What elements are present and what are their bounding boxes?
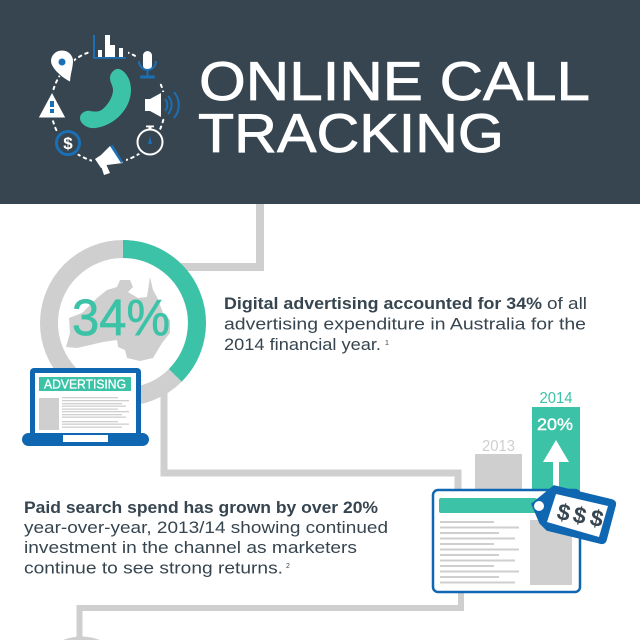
tag dollar signs: $	[555, 498, 573, 526]
bar 2013	[475, 454, 522, 494]
icon: bar chart	[90, 33, 128, 60]
tag dollar signs	[555, 498, 606, 532]
text block: digital advertising: Digital advertising accounted for 34%	[224, 295, 542, 313]
title: ONLINE CALL	[199, 50, 590, 112]
text block: digital advertising	[224, 295, 587, 354]
text block: paid search: continue to see strong returns.	[24, 560, 283, 578]
icon: laptop with advertising	[22, 368, 149, 446]
dashed ring	[51, 49, 165, 163]
icon: microphone	[136, 49, 160, 82]
connector line 3	[80, 590, 461, 640]
tag dollar signs: $	[571, 501, 589, 529]
text block: paid search: Paid search spend has grown by over 20%	[24, 499, 378, 517]
text block: paid search: 2	[286, 563, 290, 570]
icon: megaphone	[92, 143, 126, 177]
donut chart: 34%	[49, 249, 197, 397]
icon: speaker	[143, 92, 181, 118]
icon: map pin	[50, 50, 74, 82]
icon: dollar coin: $	[63, 134, 73, 153]
icon: laptop with advertising: ADVERTISING	[44, 376, 126, 392]
bar chart: 2013 vs 2014: 20%	[537, 415, 573, 434]
icon: map of Australia	[66, 277, 170, 361]
bar chart: 2013 vs 2014: 2014	[540, 390, 573, 407]
bar 2014	[532, 407, 580, 494]
text block: paid search: year-over-year, 2013/14 showing continued	[24, 519, 388, 537]
icon: web page card	[433, 490, 580, 592]
icon: phone handset	[80, 69, 131, 128]
header band	[0, 0, 640, 204]
header icon cluster	[38, 33, 181, 177]
connector line 2	[164, 390, 458, 495]
text block: digital advertising: 2014 financial year.	[224, 336, 381, 354]
tag dollar signs: $	[588, 504, 606, 532]
advertising banner	[39, 377, 131, 391]
icon: dollar coin	[53, 128, 83, 158]
text block: digital advertising: 1	[385, 340, 389, 347]
title: TRACKING	[198, 102, 504, 164]
connector line 1	[180, 204, 260, 267]
icon: up arrow	[543, 440, 569, 492]
text block: paid search: investment in the channel as marketers	[24, 539, 357, 557]
bar chart: 2013 vs 2014: 2013	[482, 438, 515, 455]
icon: warning triangle	[38, 92, 66, 118]
donut value: 34%	[72, 289, 170, 346]
laptop base	[22, 433, 149, 446]
icon: price tag	[532, 486, 615, 543]
text block: paid search	[24, 499, 388, 578]
text block: digital advertising: advertising expenditure in Australia for the	[224, 316, 586, 334]
title	[198, 50, 590, 164]
icon: stopwatch	[134, 126, 166, 158]
text block: digital advertising: of all	[547, 295, 587, 313]
bar chart: 2013 vs 2014	[475, 390, 580, 494]
partial circle at bottom	[63, 636, 100, 640]
